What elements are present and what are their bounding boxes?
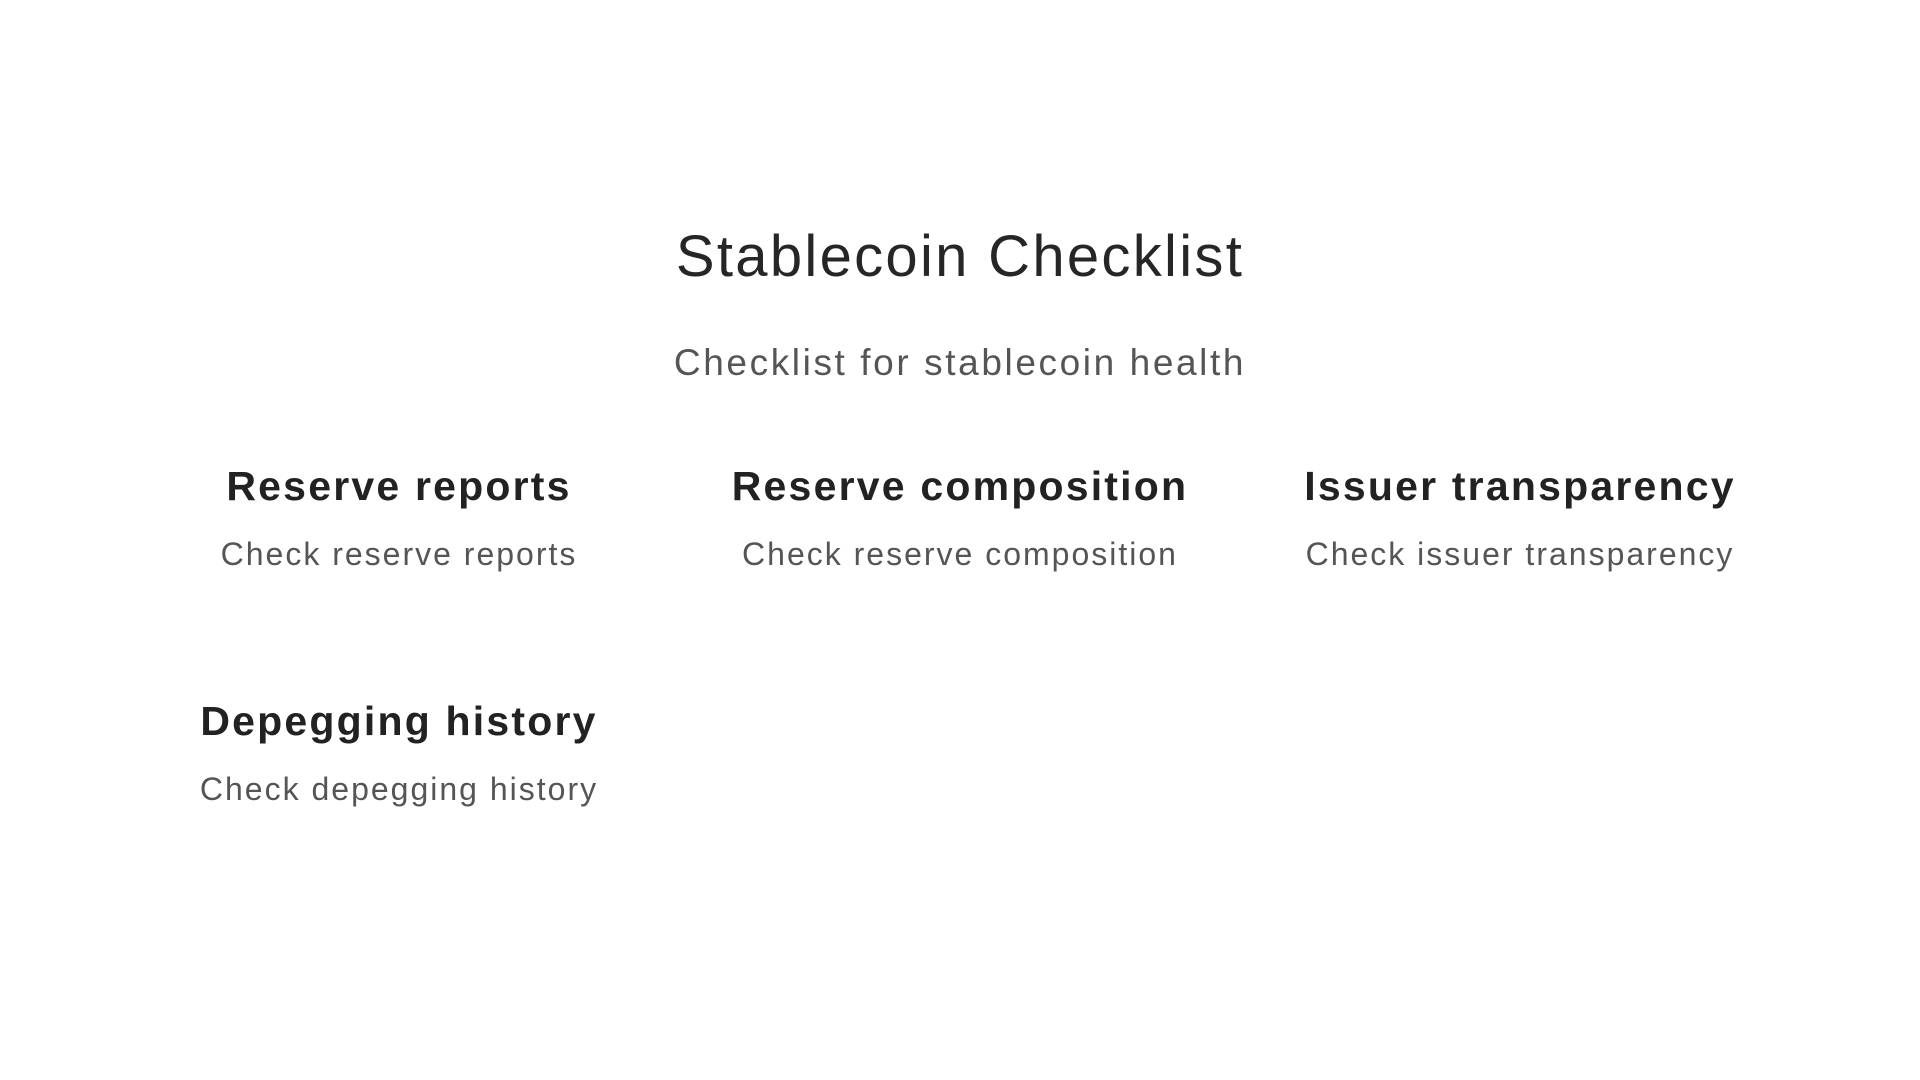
item: Depegging history: Check depegging history xyxy=(200,771,598,807)
item: Reserve composition: Check reserve composition xyxy=(742,536,1178,572)
heading: Depegging history xyxy=(200,698,598,744)
item: Depegging history xyxy=(200,698,598,807)
item: Issuer transparency: Check issuer transparency xyxy=(1306,536,1734,572)
item: Issuer transparency xyxy=(1304,463,1736,572)
title: Stablecoin Checklist xyxy=(676,224,1244,289)
item: Reserve reports: Check reserve reports xyxy=(221,536,577,572)
heading: Reserve composition xyxy=(732,463,1188,509)
item: Reserve reports xyxy=(221,463,577,572)
subtitle: Checklist for stablecoin health xyxy=(674,342,1246,383)
heading: Reserve reports xyxy=(226,463,572,509)
item: Reserve composition xyxy=(732,463,1188,572)
heading: Issuer transparency xyxy=(1304,463,1736,509)
